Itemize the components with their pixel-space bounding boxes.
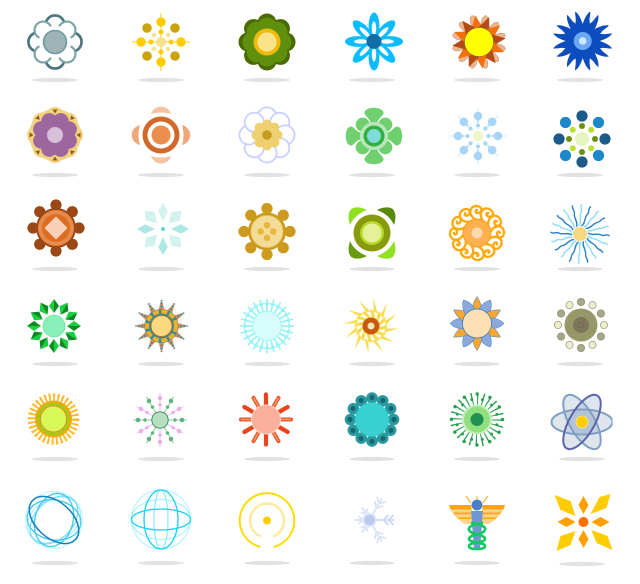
icon: olive ring with corner crescents — [349, 207, 395, 259]
icon: pale blue dotted snowflake — [449, 107, 507, 165]
icon: lime sun with orange rays — [32, 398, 74, 440]
icon: brown gear flower with diamond — [27, 199, 85, 257]
icon: atom — [552, 389, 612, 455]
icon: blue wavy sun — [550, 204, 610, 264]
icon: teal disc with blobs — [345, 392, 399, 447]
icon: olive disc with beads — [554, 298, 608, 352]
icon: green virus burst — [452, 394, 502, 445]
icon: blue and lime dot rings — [553, 110, 611, 168]
icon: orange ring with outer arcs — [132, 106, 190, 164]
icon: pale teal diamond star — [137, 203, 189, 255]
icon: blue and amber petal flower — [450, 296, 504, 350]
ground shadows — [32, 78, 605, 566]
icon: green eight-lobed flower — [238, 14, 296, 70]
icon: yellow dotted burst — [132, 13, 190, 71]
icon: cyan wire globe — [132, 490, 190, 549]
icon: blue orbit rings — [19, 487, 89, 553]
icon: tribal orange and teal sun — [134, 299, 188, 353]
icon: orange spiral wreath — [450, 206, 504, 260]
icon: purple and gold scalloped flower — [26, 106, 84, 164]
icon: orange sunflower — [451, 14, 507, 70]
icon: pink and green beaded star — [133, 393, 187, 447]
icon: pale snowflake — [354, 496, 394, 544]
icon: yellow lightning sun — [343, 298, 399, 354]
icon: periwinkle outlined flower — [239, 107, 295, 163]
icon: royal blue spiked flower — [553, 12, 612, 70]
icon: green leaf sun — [27, 299, 81, 353]
icon: cyan ray sun — [240, 299, 294, 353]
icon: yellow and orange diamond star — [554, 494, 612, 551]
icon: mustard button flower — [238, 203, 296, 260]
icon: cyan petal flower — [345, 12, 403, 70]
icon: yellow broken rings — [240, 493, 294, 547]
icon: slate quatrefoil flower — [28, 15, 82, 69]
icon: coral sun with bars — [241, 394, 291, 444]
icon: winged caduceus — [449, 496, 505, 549]
icon: green clover flower — [346, 108, 402, 164]
